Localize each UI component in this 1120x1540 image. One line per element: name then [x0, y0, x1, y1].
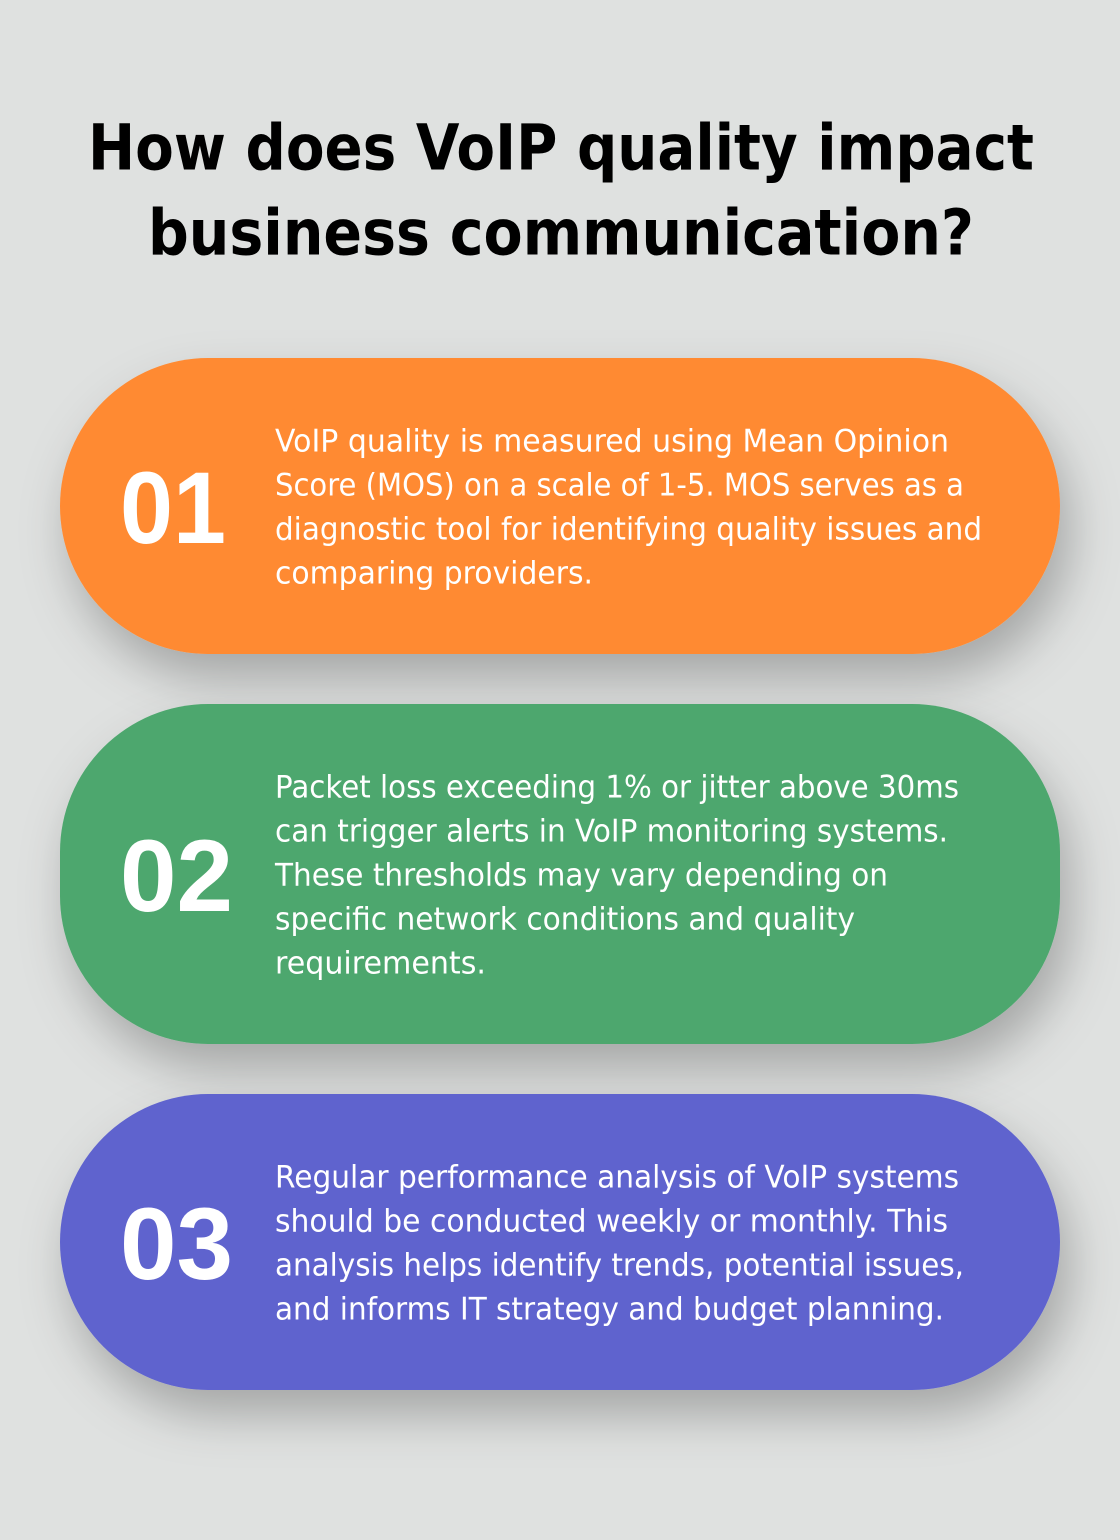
number 03: 03 — [120, 1187, 233, 1301]
description 02: can trigger alerts in VoIP monitoring systems. — [275, 814, 948, 850]
indigo pill background — [60, 1094, 1060, 1390]
description 02: Packet loss exceeding 1% or jitter above 30ms — [275, 770, 959, 806]
title — [88, 112, 1034, 270]
description 02 — [274, 770, 959, 982]
description 03: should be conducted weekly or monthly. This — [275, 1204, 948, 1240]
number 02: 02 — [120, 819, 233, 933]
orange pill background — [60, 358, 1060, 654]
description 01: comparing providers. — [275, 556, 593, 592]
description 01 — [275, 424, 982, 592]
description 03 — [275, 1160, 964, 1328]
description 02: requirements. — [275, 946, 486, 982]
panel: step 03 — [60, 1094, 1060, 1390]
number 01: 01 — [120, 451, 226, 565]
description 01: VoIP quality is measured using Mean Opinion — [275, 424, 949, 460]
description 01: Score (MOS) on a scale of 1-5. MOS serves as a — [275, 468, 964, 504]
title: How does VoIP quality impact — [88, 112, 1034, 184]
description 01: diagnostic tool for identifying quality issues and — [275, 512, 982, 548]
description 03: and informs IT strategy and budget planning. — [275, 1292, 944, 1328]
description 03: analysis helps identify trends, potential issues, — [275, 1248, 964, 1284]
green pill background — [60, 704, 1060, 1044]
description 02: specific network conditions and quality — [275, 902, 855, 938]
description 03: Regular performance analysis of VoIP systems — [275, 1160, 959, 1196]
title: business communication? — [148, 196, 974, 270]
panel: step 02 — [60, 704, 1060, 1044]
panel: step 01 — [60, 358, 1060, 654]
description 02: These thresholds may vary depending on — [274, 858, 888, 894]
